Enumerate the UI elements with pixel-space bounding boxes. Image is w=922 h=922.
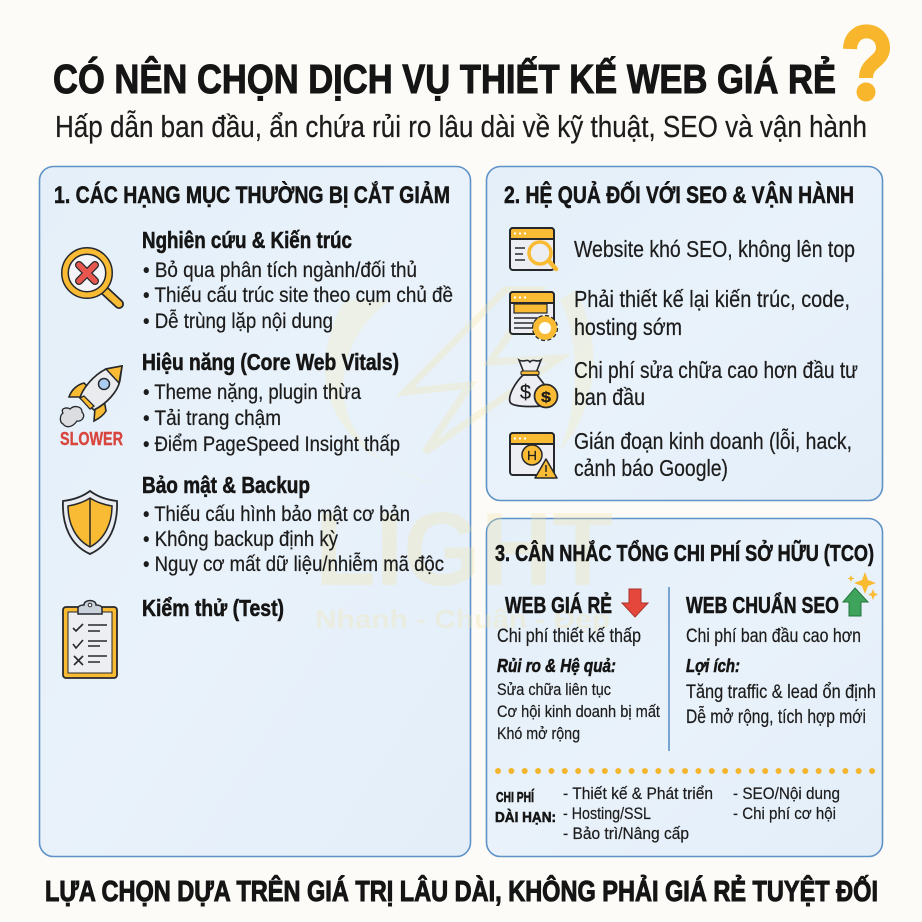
column: SEO web: Tăng traffic & lead ổn định [686, 682, 876, 703]
long-term cost list: - SEO/Nội dung [733, 784, 840, 803]
panel: cut items background [40, 166, 470, 856]
long-term cost label: CHI PHÍ [496, 789, 535, 806]
text: security: • Thiếu cấu hình bảo mật cơ bản [143, 503, 410, 526]
watermark logo: LIGHT [315, 492, 613, 608]
long-term cost list: - Hosting/SSL [563, 804, 651, 823]
icon: browser search [510, 228, 556, 270]
icon: browser gear [510, 292, 558, 340]
column: SEO web [686, 572, 878, 728]
text: repair costs: ban đầu [574, 384, 645, 410]
icon: browser warning [510, 433, 557, 478]
column: cheap web: Sửa chữa liên tục [497, 680, 611, 699]
text: performance: • Điểm PageSpeed Insight thấp [143, 433, 400, 456]
icon: browser warning: H [527, 448, 537, 463]
icon: money bag [510, 360, 558, 408]
icon: question mark [850, 31, 883, 101]
text: redesign: Phải thiết kế lại kiến trúc, code, [574, 286, 850, 312]
text: performance: Hiệu năng (Core Web Vitals) [142, 349, 399, 375]
column divider [668, 587, 670, 751]
column: cheap web: Rủi ro & Hệ quả: [497, 656, 616, 676]
text: performance: • Tải trang chậm [143, 407, 281, 430]
heading 1: 1. CÁC HẠNG MỤC THƯỜNG BỊ CẮT GIẢM [54, 180, 450, 209]
text: interruption: cảnh báo Google) [574, 455, 728, 481]
panel 1 content [54, 180, 453, 678]
column: SEO web: Lợi ích: [686, 656, 740, 676]
text: interruption: Gián đoạn kinh doanh (lỗi, hack, [574, 428, 852, 454]
long-term cost list: - Chi phí cơ hội [733, 804, 836, 823]
icon: magnifier with x [65, 251, 119, 304]
text: repair costs [574, 357, 858, 410]
icon: shield [63, 491, 117, 554]
text: interruption [574, 428, 852, 481]
panel: consequences background [486, 166, 882, 500]
text: research: Nghiên cứu & Kiến trúc [142, 227, 352, 253]
long-term cost list [563, 784, 840, 843]
watermark logo: Nhanh - Chuẩn - Đẹp [315, 604, 610, 634]
column: cheap web: WEB GIÁ RẺ [505, 590, 612, 618]
text: hard to SEO: Website khó SEO, không lên top [574, 236, 855, 262]
icon: green up arrow with sparkle [843, 572, 878, 616]
icon: red down arrow [622, 589, 648, 617]
text: security: • Nguy cơ mất dữ liệu/nhiễm mã độc [143, 553, 444, 576]
column: cheap web: Cơ hội kinh doanh bị mất [497, 702, 660, 721]
panel 3 content [495, 538, 878, 843]
dotted divider [498, 768, 875, 774]
watermark logo [315, 290, 613, 634]
text: research: • Bỏ qua phân tích ngành/đối thủ [143, 259, 417, 282]
long-term cost list: - Thiết kế & Phát triển [563, 784, 713, 803]
text: security: Bảo mật & Backup [142, 472, 310, 498]
long-term cost label: DÀI HẠN: [495, 809, 556, 826]
text: testing: Kiểm thử (Test) [142, 595, 284, 621]
text: research: • Thiếu cấu trúc site theo cụm chủ đề [143, 284, 453, 307]
text: research: • Dễ trùng lặp nội dung [143, 310, 333, 333]
text: redesign: hosting sớm [574, 314, 682, 340]
icon: clipboard checklist [63, 600, 117, 678]
text: redesign [574, 286, 850, 340]
column: cheap web: Khó mở rộng [497, 724, 580, 743]
icon: money bag: $ [541, 389, 552, 406]
panel: TCO background [486, 518, 882, 856]
text: security [142, 472, 444, 576]
text: research [142, 227, 453, 333]
panel 2 content [504, 180, 858, 481]
column: SEO web: WEB CHUẨN SEO [686, 591, 839, 618]
text: performance [142, 349, 400, 456]
text: security: • Không backup định kỳ [143, 528, 338, 551]
long-term cost list: - Bảo trì/Nâng cấp [563, 824, 689, 843]
column: SEO web: Dễ mở rộng, tích hợp mới [686, 706, 866, 728]
long-term cost label [495, 789, 556, 826]
icon: rocket slower: SLOWER [60, 429, 123, 449]
icon: money bag: $ [520, 382, 531, 404]
text: repair costs: Chi phí sửa chữa cao hơn đầu tư [574, 357, 858, 383]
text: performance: • Theme nặng, plugin thừa [143, 381, 361, 404]
column: cheap web [497, 589, 660, 743]
icon: rocket slower [60, 366, 123, 449]
column: cheap web: Chi phí thiết kế thấp [497, 626, 641, 647]
column: SEO web: Chi phí ban đầu cao hơn [686, 626, 861, 647]
